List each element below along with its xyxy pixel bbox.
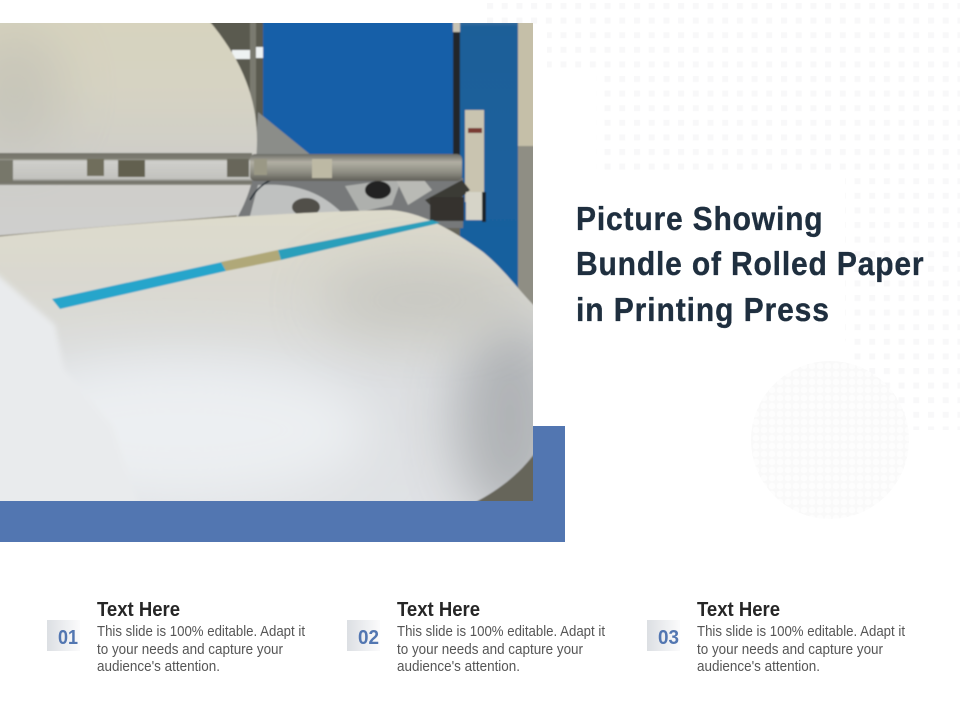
- item body 03: [697, 623, 906, 675]
- item body 02: [397, 623, 606, 675]
- item heading 01: Text Here: [97, 599, 180, 621]
- number badge 01: 01: [58, 627, 78, 649]
- item 01: [47, 599, 306, 675]
- item body 02: audience's attention.: [397, 658, 520, 675]
- title: Bundle of Rolled Paper: [576, 245, 924, 282]
- item body 02: This slide is 100% editable. Adapt it: [397, 623, 606, 640]
- item body 03: This slide is 100% editable. Adapt it: [697, 623, 906, 640]
- dotted circle decoration: [750, 360, 910, 520]
- item body 01: [97, 623, 306, 675]
- item heading 02: Text Here: [397, 599, 480, 621]
- background dot grid pattern: [487, 0, 960, 430]
- title: in Printing Press: [576, 291, 829, 328]
- right blue column: [460, 0, 520, 295]
- label strip: [465, 110, 484, 202]
- number badge 03: 03: [658, 627, 679, 649]
- grey wedge: [255, 112, 312, 156]
- blue machine panel: [262, 23, 454, 155]
- machinery under the pipe: [238, 178, 463, 228]
- torn sheet on roll: [0, 275, 60, 501]
- item heading 03: Text Here: [697, 599, 780, 621]
- item body 02: to your needs and capture your: [397, 641, 583, 658]
- blue accent block behind photo: [0, 426, 565, 542]
- item 02: [347, 599, 606, 675]
- cyan tape strip on roll: [52, 262, 226, 309]
- steel pipe: [0, 153, 252, 185]
- number badge 03: [647, 620, 680, 651]
- item body 03: audience's attention.: [697, 658, 820, 675]
- title: [576, 200, 924, 328]
- item body 01: to your needs and capture your: [97, 641, 283, 658]
- upper paper roll: [0, 23, 258, 236]
- item body 01: This slide is 100% editable. Adapt it: [97, 623, 306, 640]
- number badge 02: [347, 620, 380, 651]
- large paper roll: [0, 209, 533, 501]
- number badge 01: [47, 620, 80, 651]
- photo: rolled paper in printing press: [0, 23, 533, 501]
- title: Picture Showing: [576, 200, 823, 237]
- item body 03: to your needs and capture your: [697, 641, 883, 658]
- number badge 02: 02: [358, 627, 379, 649]
- item 03: [647, 599, 906, 675]
- item body 01: audience's attention.: [97, 658, 220, 675]
